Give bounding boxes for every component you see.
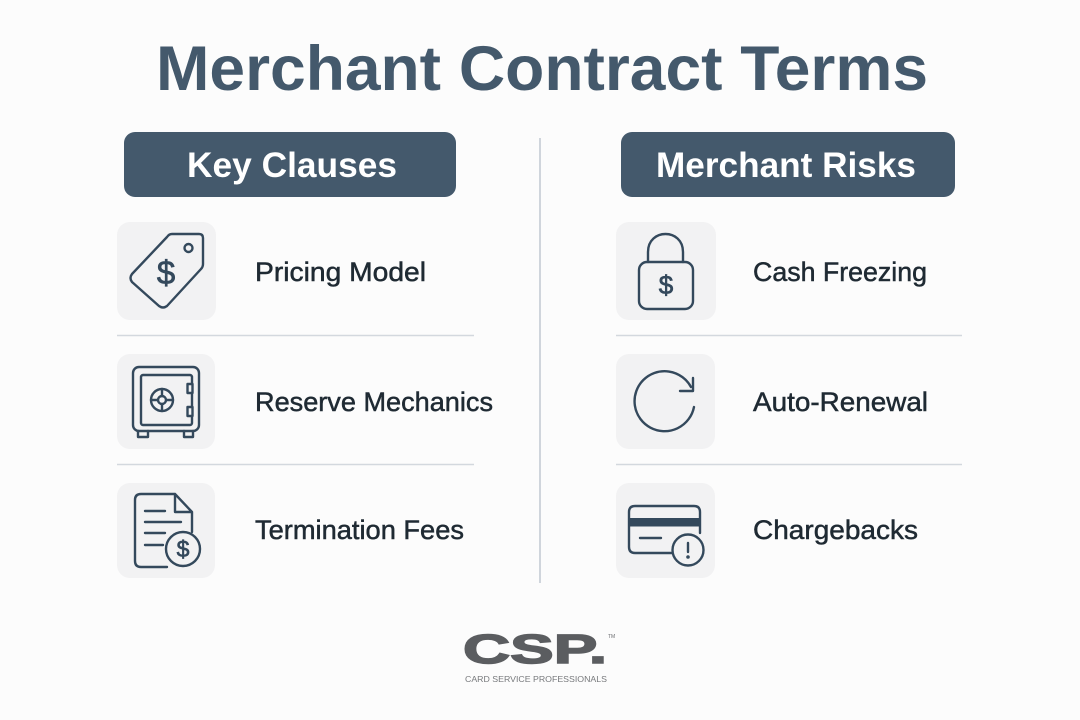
icon: circular arrow	[616, 354, 715, 449]
label: Reserve Mechanics	[255, 387, 493, 417]
row: reserve mechanics	[117, 354, 493, 449]
icon: safe	[117, 354, 215, 449]
icon: padlock with dollar	[616, 222, 716, 320]
heading: merchant risks: Merchant Risks	[656, 146, 916, 185]
logo: CSP: TM	[608, 634, 615, 640]
label: Auto-Renewal	[753, 387, 928, 417]
icon: document with dollar	[117, 483, 215, 578]
icon: price tag: $	[157, 254, 175, 291]
heading: key clauses	[124, 132, 456, 197]
icon: price tag	[117, 222, 216, 320]
heading: key clauses: Key Clauses	[187, 146, 397, 185]
panel: key clauses	[117, 132, 493, 578]
logo: CSP: CARD SERVICE PROFESSIONALS	[465, 674, 607, 684]
row: pricing model	[117, 222, 426, 320]
panel: merchant risks	[616, 132, 962, 578]
row: termination fees	[117, 483, 464, 578]
label: Chargebacks	[753, 515, 918, 545]
title: Merchant Contract Terms	[156, 34, 928, 104]
divider between columns	[539, 138, 541, 583]
label: Cash Freezing	[753, 257, 927, 287]
row: chargebacks	[616, 483, 918, 578]
icon: document with dollar: $	[177, 536, 190, 562]
logo: CSP: CSP.	[463, 626, 607, 672]
row: auto-renewal	[616, 354, 928, 449]
row: cash freezing	[616, 222, 927, 320]
logo: CSP	[463, 626, 615, 684]
icon: padlock with dollar: $	[659, 270, 674, 300]
label: Termination Fees	[255, 515, 464, 545]
icon: credit card with alert	[616, 483, 715, 578]
heading: merchant risks	[621, 132, 955, 197]
label: Pricing Model	[255, 257, 426, 287]
